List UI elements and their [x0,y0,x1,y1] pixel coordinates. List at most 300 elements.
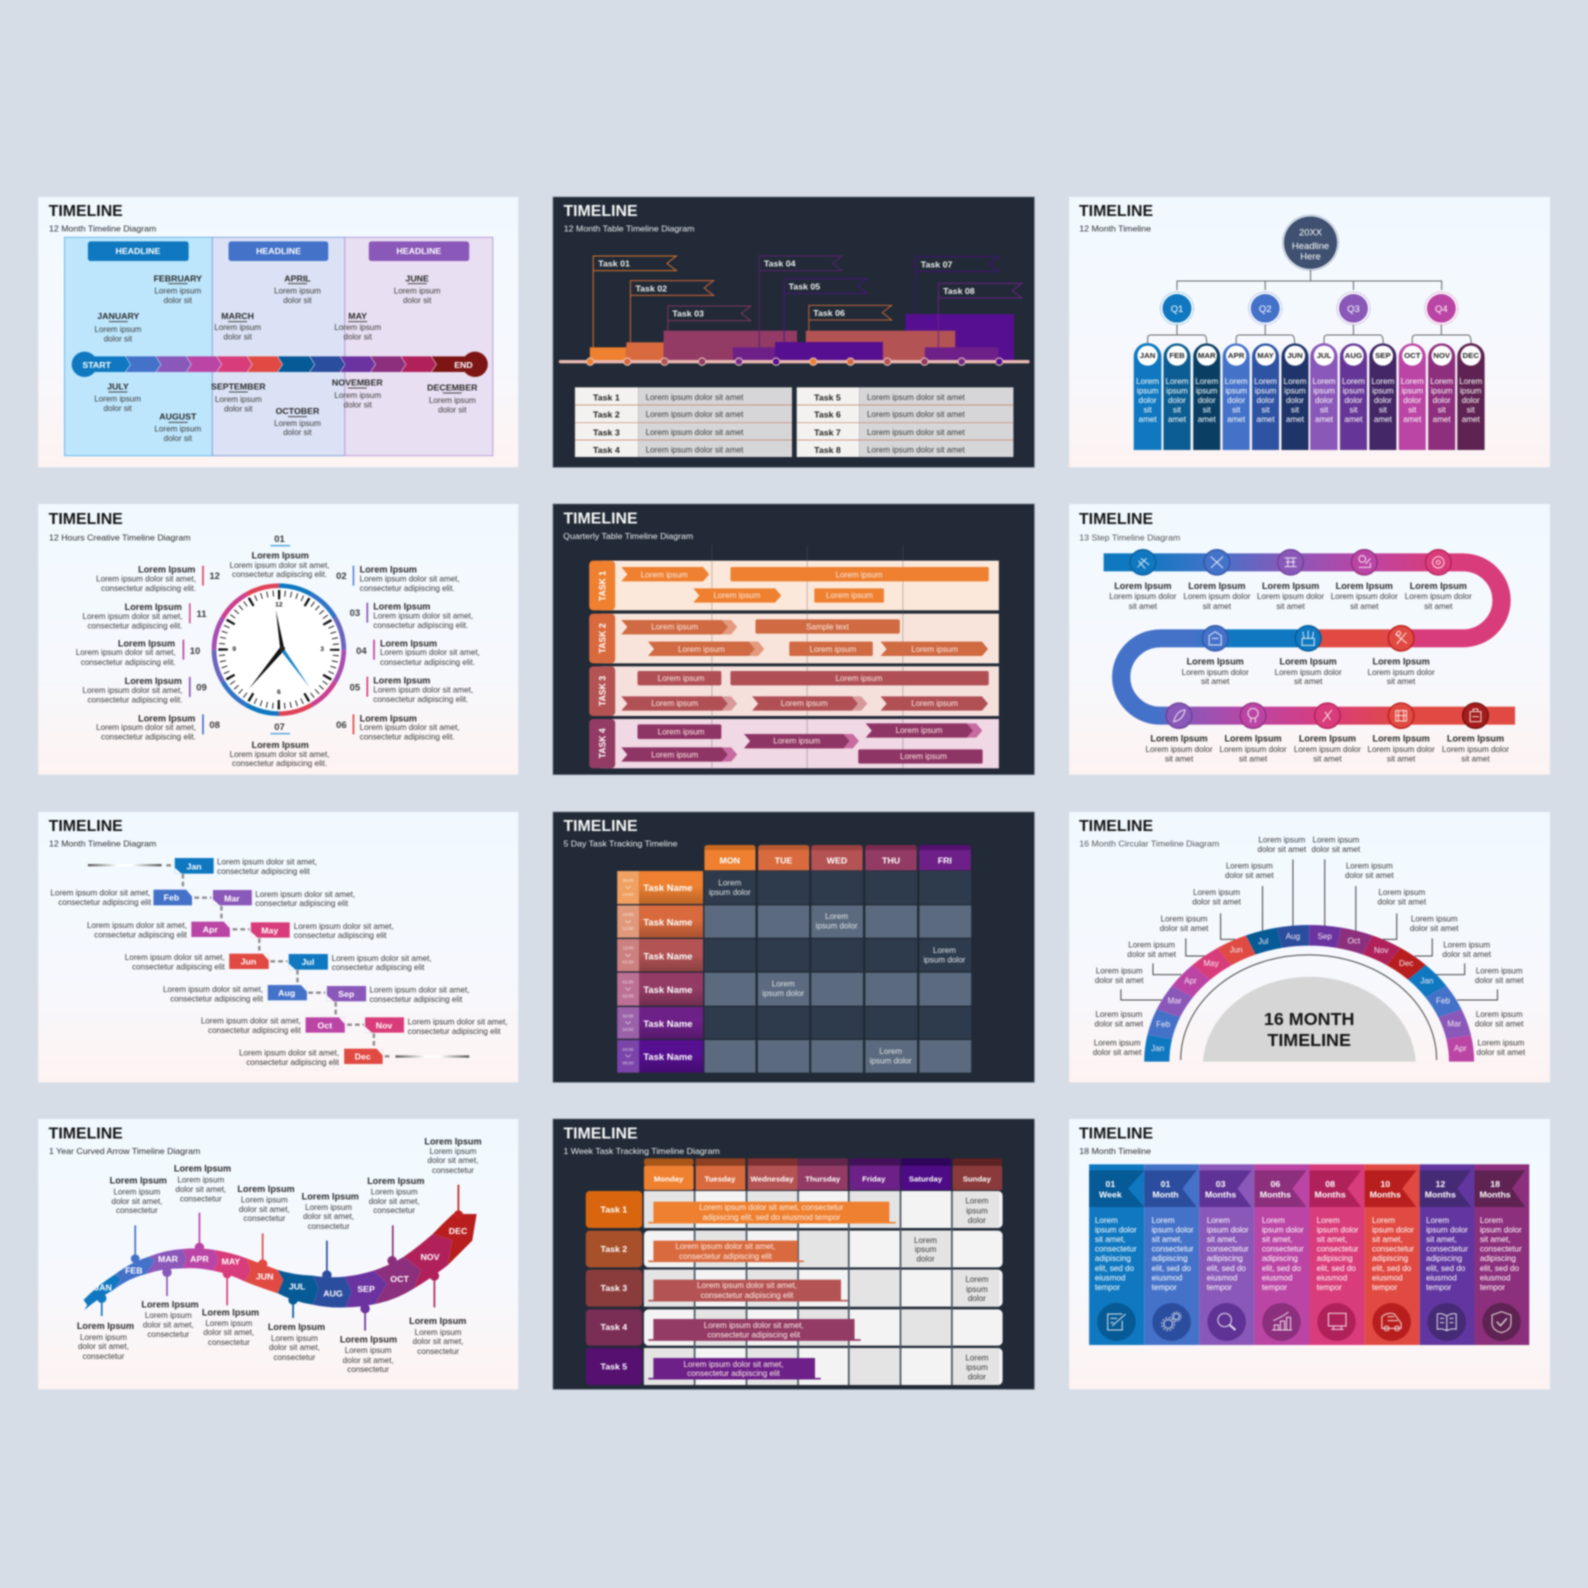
column descriptions: elit, sed do [1262,1264,1302,1273]
month columns: NOV [1433,351,1451,360]
task bars: Lorem ipsum dolor sit amet, [704,1321,804,1330]
month labels: Lorem ipsum [154,287,202,295]
curved arrow: MAR [158,1254,179,1264]
task name column [617,871,703,1073]
top item 01: Lorem ipsum dolor sit amet, [230,561,330,570]
step labels row 1: Lorem Ipsum [1410,581,1467,591]
left descriptions: Lorem ipsum dolor sit amet, [239,1049,339,1057]
lower callouts: Lorem ipsum [415,1328,462,1337]
left descriptions: Lorem ipsum dolor sit amet, [125,953,225,962]
step labels row 3: Lorem Ipsum [1224,734,1282,744]
month columns: ipsum [1460,387,1482,395]
month boxes [153,858,404,1064]
right items 02 to 06 [336,564,480,741]
outer text labels: dolor sit amet [1475,976,1524,985]
ribbon flags: Months [1260,1189,1291,1199]
upper callouts: Lorem ipsum [113,1188,161,1196]
task labels: TASK 1 [597,571,607,601]
column descriptions: eiusmod [1317,1274,1347,1282]
column descriptions: elit, sed do [1372,1264,1412,1273]
semicircular month ring: Mar [1168,997,1182,1005]
month labels: dolor sit [438,406,467,414]
upper callouts: dolor sit amet, [111,1197,162,1206]
outer text labels: dolor sit amet [1095,1020,1144,1028]
ribbon flags: 03 [1216,1179,1226,1189]
right items 02 to 06: Lorem Ipsum [360,713,417,723]
ribbon flags: Months [1315,1189,1346,1199]
outer text labels: Lorem ipsum [1226,862,1273,870]
task name column: 12:00 [623,926,634,931]
bottom item 07: Lorem Ipsum [252,740,309,750]
step labels row 1: sit amet [1424,602,1453,611]
left items 12 to 08: consectetur adipiscing elit. [101,584,196,593]
lower callouts: Lorem ipsum [80,1333,127,1342]
subtitle: 12 Month Table Timeline Diagram [564,224,694,234]
task labels [597,571,607,758]
bar labels: Lorem ipsum [658,728,705,736]
side notes: Lorem [965,1197,989,1205]
semicircular month ring: Mar [1447,1020,1461,1028]
month labels: dolor sit [164,434,193,443]
center half circle with caption: 16 MONTH [1264,1009,1354,1029]
task name column: 06:00 [623,1061,634,1065]
schedule cells: ipsum dolor [762,989,804,998]
step labels row 3: Lorem Ipsum [1373,734,1430,744]
title: TIMELINE [49,511,123,528]
lower callouts: consectetur [417,1347,459,1356]
month columns: dolor [1198,396,1216,405]
outer text labels: dolor sit amet [1093,1048,1142,1057]
subtitle: 12 Month Timeline Diagram [49,224,156,234]
task bars: consectetur adipiscing elit [687,1369,781,1378]
month columns: amet [1168,415,1187,424]
right items 02 to 06: Lorem ipsum dolor sit amet, [360,723,460,732]
quarter circles [1160,292,1458,325]
task name column: Task Name [643,1018,693,1029]
month columns: ipsum [1196,387,1218,395]
curved arrow: JUL [289,1282,306,1292]
subtitle: 12 Hours Creative Timeline Diagram [49,532,191,542]
weekday header: Saturday [909,1175,943,1183]
step labels row 3: Lorem ipsum dolor [1294,745,1361,754]
column descriptions: eiusmod [1207,1274,1237,1282]
ribbon flags: 06 [1270,1179,1280,1189]
column descriptions: ipsum dolor [1317,1226,1359,1234]
curved arrow: AUG [323,1288,343,1298]
side notes [914,1197,989,1381]
right descriptions: Lorem ipsum dolor sit amet, [294,922,394,931]
bar labels: Lorem ipsum [713,591,761,600]
column descriptions: Lorem [1372,1216,1395,1225]
lower callouts: consectetur [147,1330,190,1339]
task bars [648,1202,896,1379]
outer text labels: dolor sit amet [1410,924,1459,933]
month labels: FEBRUARY [154,273,202,283]
weekday header: TUE [775,855,793,865]
curved arrow: JAN [94,1282,112,1292]
column descriptions: ipsum dolor [1426,1226,1468,1234]
left descriptions: consectetur adipiscing elit [208,1026,302,1035]
task 1 bars [621,567,989,603]
month columns: amet [1139,415,1157,424]
side notes: dolor [968,1216,986,1225]
month labels: Lorem ipsum [274,287,321,295]
panel: 13 step snake timeline [1069,504,1550,775]
curved arrow: NOV [420,1252,440,1262]
task table left: Task 2 [593,410,620,420]
right descriptions: Lorem ipsum dolor sit amet, [408,1018,508,1026]
schedule cells: ipsum dolor [870,1057,912,1065]
icon circles [1097,1303,1521,1341]
step labels row 3: sit amet [1165,755,1194,763]
month boxes: Nov [376,1021,392,1031]
column descriptions: ipsum dolor [1372,1226,1414,1234]
column descriptions: ipsum dolor [1095,1226,1137,1234]
month columns: AUG [1345,351,1362,360]
weekday header: Sunday [963,1175,992,1183]
left descriptions: consectetur adipiscing elit [132,963,226,971]
month columns: amet [1344,415,1363,424]
column descriptions: eiusmod [1426,1274,1457,1282]
flag labels: Task 01 [598,258,630,268]
column descriptions: eiusmod [1372,1274,1403,1282]
side notes: Lorem [914,1236,937,1245]
upper callouts: dolor sit amet, [369,1197,420,1206]
weekday header: Thursday [805,1175,841,1183]
column descriptions: elit, sed do [1207,1264,1246,1273]
subtitle: Quarterly Table Timeline Diagram [563,531,693,541]
column descriptions: elit, sed do [1095,1264,1135,1273]
column descriptions: adipiscing [1372,1254,1408,1263]
upper callouts: consectetur [116,1206,158,1215]
lower callouts: Lorem ipsum [271,1334,318,1343]
bar labels [641,571,958,761]
left items 12 to 08: 08 [209,719,220,730]
month columns: sit [1232,406,1241,414]
schedule cells: ipsum dolor [816,922,858,930]
ribbon flags [1089,1170,1525,1207]
month boxes: Jul [302,957,314,967]
panel: 12 month table timeline [553,197,1034,467]
right items 02 to 06: consectetur adipiscing elit. [373,695,468,704]
ribbon flags: 12 [1435,1179,1445,1189]
column descriptions: eiusmod [1152,1274,1182,1282]
left descriptions: consectetur adipiscing elit [94,931,188,939]
title: TIMELINE [1079,1126,1153,1142]
left items 12 to 08: 09 [196,682,207,692]
upper callouts: Lorem ipsum [305,1203,352,1212]
clock: 3 [320,646,324,653]
outer text labels: Lorem ipsum [1476,1010,1523,1019]
column descriptions: sit amet, [1480,1235,1511,1244]
title: TIMELINE [1079,203,1153,220]
semicircular month ring: Apr [1184,977,1197,985]
month labels: Lorem ipsum [214,323,261,332]
bar labels: Lorem ipsum [678,645,725,654]
left items 12 to 08: 10 [190,645,200,656]
left items 12 to 08: Lorem Ipsum [125,602,182,612]
left descriptions: Lorem ipsum dolor sit amet, [163,985,263,994]
month labels: dolor sit [164,296,193,305]
quarter circles: Q3 [1347,303,1360,314]
panel: quarterly table timeline [553,504,1034,775]
weekday header: WED [827,855,847,865]
bar labels: Lorem ipsum [896,726,943,735]
column backgrounds [65,237,493,456]
bottom item 07: 07 [274,721,285,732]
month columns: amet [1403,415,1422,424]
column descriptions: tempor [1207,1283,1232,1292]
outer text labels: Lorem ipsum [1094,1039,1141,1047]
task table right: Task 7 [814,427,841,437]
step labels row 2: Lorem Ipsum [1187,656,1244,666]
outer text labels: Lorem ipsum [1411,915,1458,923]
outer text labels: dolor sit amet [1095,976,1144,985]
subtitle: 12 Month Timeline Diagram [49,838,156,848]
month labels: dolor sit [343,333,373,341]
right descriptions: Lorem ipsum dolor sit amet, [369,986,469,994]
month columns: dolor [1139,396,1157,405]
top item 01: 01 [274,533,285,544]
month boxes: Jan [186,861,202,871]
quarter circles: Q4 [1435,303,1448,314]
start and end lines [88,864,469,1058]
month labels: JULY [107,381,129,391]
top item 01: consectetur adipiscing elit. [232,570,327,579]
month columns: ipsum [1137,387,1159,395]
curved arrow [83,1214,477,1310]
month boxes: Apr [203,925,218,935]
column descriptions: ipsum dolor [1207,1226,1249,1234]
task table left [575,387,792,457]
left items 12 to 08: 12 [209,570,220,581]
month labels: MARCH [221,311,254,321]
step labels row 1: sit amet [1129,602,1158,611]
panel: 12 month staircase timeline [38,812,518,1082]
outer text labels: Lorem ipsum [1443,941,1490,949]
left items 12 to 08: Lorem ipsum dolor sit amet, [96,575,196,583]
month labels: Lorem ipsum [334,323,381,332]
flag labels: Task 04 [764,258,796,268]
right items 02 to 06: consectetur adipiscing elit. [360,733,455,741]
month columns: dolor [1462,396,1480,405]
top item 01: Lorem Ipsum [252,551,309,561]
month columns: Lorem [1342,377,1365,386]
step labels row 1: Lorem ipsum dolor [1183,592,1251,601]
right descriptions: Lorem ipsum dolor sit amet, [255,890,355,899]
step labels row 2: Lorem ipsum dolor [1368,668,1435,677]
month columns: MAR [1198,351,1216,360]
task tabs: Task 3 [600,1283,627,1293]
upper callouts: Lorem ipsum [241,1196,288,1204]
headline buttons [88,241,469,261]
month labels: SEPTEMBER [211,381,266,391]
outer text labels: Lorem ipsum [1258,836,1306,844]
gantt bars [590,314,1014,360]
step labels row 2: sit amet [1294,677,1323,686]
semicircular month ring: Dec [1399,959,1413,968]
column descriptions: adipiscing [1480,1254,1516,1263]
task bars: consectetur adipiscing elit [701,1291,794,1300]
column descriptions: consectetur [1095,1245,1137,1253]
outer text labels: dolor sit amet [1345,871,1394,880]
month columns: Lorem [1430,377,1453,386]
step labels row 3: Lorem Ipsum [1447,734,1504,744]
right descriptions: consectetur adipiscing elit [255,899,349,908]
lower callouts: Lorem Ipsum [340,1334,397,1344]
month columns: DEC [1463,351,1479,360]
left items 12 to 08: Lorem ipsum dolor sit amet, [83,686,183,695]
step labels row 1: Lorem ipsum dolor [1405,592,1472,601]
left items 12 to 08: Lorem Ipsum [118,638,175,648]
month columns: sit [1408,406,1417,414]
step labels row 2: Lorem Ipsum [1280,656,1337,666]
semicircular month ring: Jan [1420,977,1433,985]
task table right: Lorem ipsum dolor sit amet [867,446,966,454]
arrow band from start to end: START [82,360,112,370]
right items 02 to 06: Lorem Ipsum [380,638,437,648]
task name column: 01:00 [623,960,634,964]
semicircular month ring: Sep [1318,932,1332,941]
column descriptions: adipiscing [1262,1254,1298,1263]
bar labels: Lorem ipsum [773,737,820,745]
ribbon flags: 01 [1161,1179,1171,1189]
month labels: dolor sit [403,296,432,305]
month columns: amet [1374,415,1393,424]
weekday header: Friday [862,1175,886,1183]
upper callouts: consectetur [373,1206,415,1215]
step labels row 1: Lorem ipsum dolor [1109,592,1177,601]
task table right [797,387,1013,457]
month columns: Lorem [1401,377,1424,386]
clock [214,586,344,714]
ribbon flags: Months [1479,1189,1511,1199]
month columns: amet [1257,415,1275,424]
month columns: JUN [1287,351,1303,360]
task 2 bars [621,619,988,656]
bar labels: Lorem ipsum [781,699,828,708]
left descriptions: consectetur adipiscing elit [58,898,152,907]
bar labels: Lorem ipsum [911,645,958,654]
task table right: Task 6 [814,410,841,420]
side notes: ipsum [915,1245,937,1254]
weekday header: Tuesday [705,1175,736,1183]
leader lines [1121,859,1497,1000]
left items 12 to 08: consectetur adipiscing elit. [81,658,176,667]
outer text labels: Lorem ipsum [1312,836,1360,844]
month columns: sit [1291,406,1300,414]
right items 02 to 06: consectetur adipiscing elit. [373,621,468,630]
outer text labels: Lorem ipsum [1095,1010,1143,1019]
bar labels: Lorem ipsum [900,752,947,761]
month columns: ipsum [1372,387,1394,395]
month columns: dolor [1344,396,1363,405]
column descriptions: tempor [1152,1283,1177,1292]
column descriptions: eiusmod [1262,1274,1292,1282]
central headline circle: Here [1300,251,1321,261]
semicircular month ring: Apr [1454,1044,1467,1053]
column descriptions: adipiscing [1095,1254,1131,1263]
step labels row 1: Lorem Ipsum [1336,581,1393,591]
connectors [1148,270,1471,343]
column descriptions: elit, sed do [1317,1264,1356,1273]
flag labels: Task 06 [813,308,845,318]
subtitle: 18 Month Timeline [1079,1146,1151,1156]
upper callouts: consectetur [243,1214,286,1223]
flag labels [598,258,975,319]
upper callouts: dolor sit amet, [428,1156,478,1165]
column descriptions: Lorem [1262,1216,1285,1225]
semicircular month ring: Jul [1258,937,1269,946]
upper callouts: Lorem Ipsum [174,1164,231,1174]
right items 02 to 06: Lorem ipsum dolor sit amet, [360,575,460,583]
column descriptions: Lorem [1095,1216,1118,1225]
month columns: dolor [1227,396,1245,405]
right descriptions: Lorem ipsum dolor sit amet, [217,858,317,866]
month boxes: Oct [318,1020,332,1030]
outer text labels: Lorem ipsum [1346,862,1393,870]
column descriptions: Lorem [1207,1216,1230,1225]
curved arrow: JUN [256,1272,273,1282]
curved arrow: MAY [222,1257,240,1267]
left items 12 to 08 [76,564,220,741]
flag labels: Task 08 [943,286,975,296]
bottom item 07 [230,721,330,768]
column descriptions: adipiscing [1317,1254,1353,1263]
task 4 bars [621,723,983,764]
side notes: dolor [968,1294,986,1303]
right items 02 to 06: consectetur adipiscing elit. [360,584,455,593]
month columns: sit [1320,406,1329,414]
semicircular month ring: Aug [1286,932,1300,941]
upper callouts: consectetur [180,1195,222,1203]
task table left: Lorem ipsum dolor sit amet [646,428,744,437]
column descriptions: consectetur [1207,1245,1249,1253]
lower callouts: Lorem Ipsum [409,1316,466,1326]
outer text labels: Lorem ipsum [1476,967,1523,975]
right items 02 to 06: Lorem Ipsum [373,676,430,686]
task bars: Lorem ipsum dolor sit amet, consectetur [699,1203,844,1212]
month columns: MAY [1257,351,1275,360]
month columns: FEB [1169,351,1185,360]
column descriptions: sit amet, [1372,1235,1403,1244]
upper callouts: Lorem ipsum [371,1188,418,1196]
center half circle with caption [1203,977,1416,1062]
lower callouts: consectetur [208,1338,250,1347]
month columns: sit [1173,406,1182,414]
task name column: 13:00 [623,946,634,950]
weekday header [644,1158,1002,1190]
month columns: JUL [1317,351,1332,360]
month columns: sit [1349,406,1358,414]
month columns [1134,343,1485,450]
weekday header: THU [882,855,900,865]
month labels: DECEMBER [427,382,478,392]
month labels [94,273,478,443]
month boxes: Aug [278,988,295,998]
month columns: sit [1438,406,1447,414]
semicircular month ring: Jun [1230,946,1243,954]
schedule cells: Lorem [772,980,795,988]
outer text labels: dolor sit amet [1160,924,1209,933]
month labels: Lorem ipsum [95,325,142,334]
outer text labels: Lorem ipsum [1096,967,1143,975]
ribbon flags: Week [1099,1189,1122,1199]
clock: 12 [275,602,283,608]
lower callouts: consectetur [82,1352,125,1361]
upper callouts: Lorem ipsum [177,1176,225,1184]
task tabs: Task 1 [600,1205,627,1215]
